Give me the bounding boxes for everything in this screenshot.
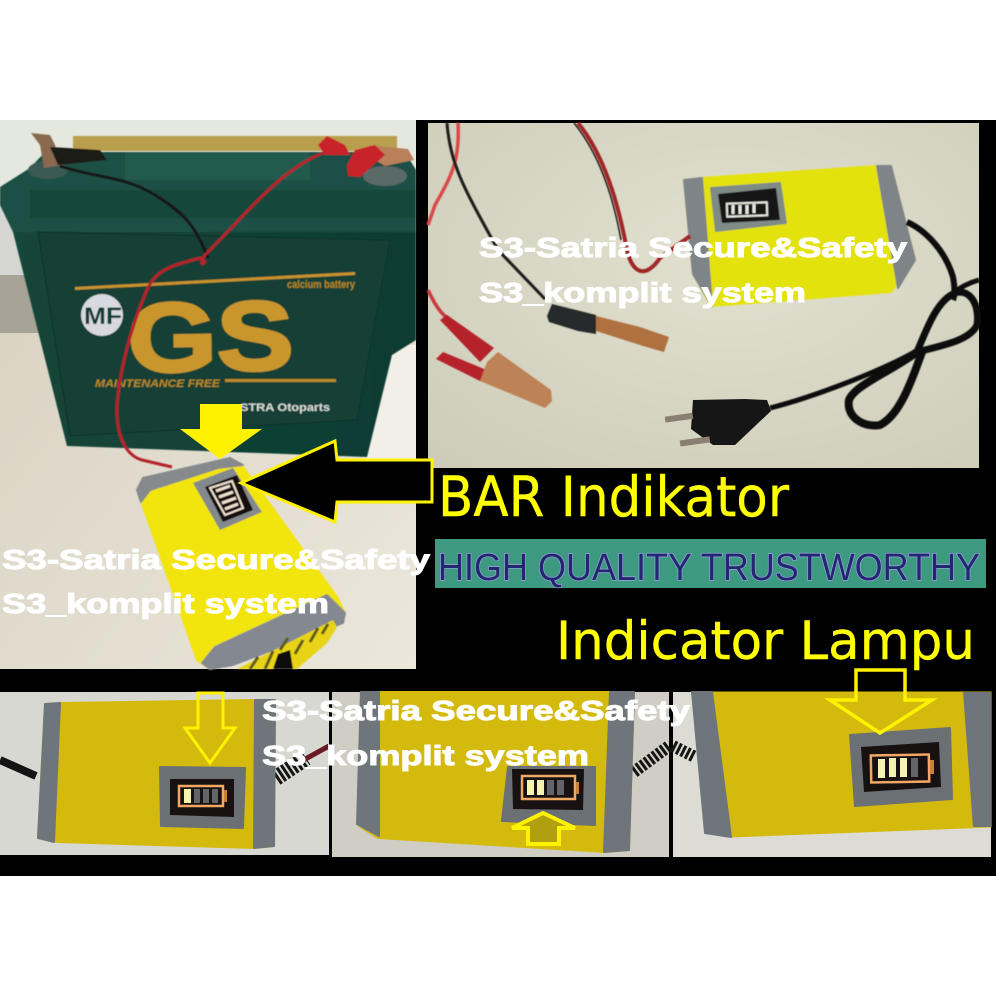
cables	[634, 746, 669, 772]
watermark: bottom row	[262, 695, 691, 771]
battery	[0, 133, 416, 467]
watermark: S3_komplit system	[479, 277, 806, 308]
display	[160, 767, 245, 828]
battery label: calcium battery: calcium battery	[287, 279, 356, 291]
red clamp	[436, 315, 552, 408]
clamp wires	[428, 123, 690, 318]
watermark: bottom row: S3-Satria Secure&Safety	[262, 695, 691, 726]
watermark: S3-Satria Secure&Safety	[2, 544, 431, 575]
panel: charger product photo	[428, 123, 979, 468]
arrow: black arrow with yellow outline	[241, 441, 432, 522]
charger vents	[237, 620, 337, 669]
charger body	[38, 700, 275, 848]
black clamp	[547, 304, 669, 352]
watermark	[2, 544, 431, 619]
banner: high quality trustworthy: HIGH QUALITY TRUSTWORTHY	[438, 547, 980, 589]
charger	[684, 166, 915, 306]
charger body	[692, 692, 991, 837]
battery label: maintenance free: MAINTENANCE FREE	[95, 378, 221, 390]
panel: battery photo	[0, 120, 431, 669]
panel: indicator three bars	[673, 692, 991, 857]
black cable	[60, 166, 208, 258]
heading: Indicator Lampu: Indicator Lampu	[556, 611, 975, 672]
battery label: MF badge: MF	[84, 303, 122, 330]
watermark: bottom row: S3_komplit system	[262, 740, 589, 771]
battery label: Astra Otoparts: STRA Otoparts	[240, 402, 330, 414]
battery label: line	[75, 272, 355, 290]
charger seen from above	[137, 458, 345, 669]
power plug	[665, 399, 771, 447]
power cord	[770, 222, 979, 426]
cables	[0, 746, 329, 778]
arrow: yellow down arrow to charger	[180, 404, 262, 459]
arrow: up	[512, 813, 575, 844]
battery label: MF badge	[81, 294, 123, 336]
charger display	[711, 183, 786, 231]
display	[850, 728, 952, 806]
watermark: S3-Satria Secure&Safety	[479, 232, 908, 263]
arrow: down outline to third indicator	[830, 670, 932, 733]
cable	[673, 746, 695, 757]
terminals and clamps	[28, 133, 414, 186]
panel: indicator one bar	[0, 692, 329, 855]
arrow: down	[185, 693, 235, 763]
charger display	[193, 468, 262, 530]
watermark	[479, 232, 908, 308]
display	[502, 767, 595, 825]
watermark: S3_komplit system	[2, 588, 329, 619]
heading: BAR Indikator: BAR Indikator	[438, 465, 789, 529]
black canvas	[0, 120, 996, 876]
charger body	[357, 692, 634, 852]
panel: indicator two bars	[332, 692, 669, 857]
red cable	[117, 153, 323, 467]
battery label: GS logo: GS	[126, 280, 294, 393]
